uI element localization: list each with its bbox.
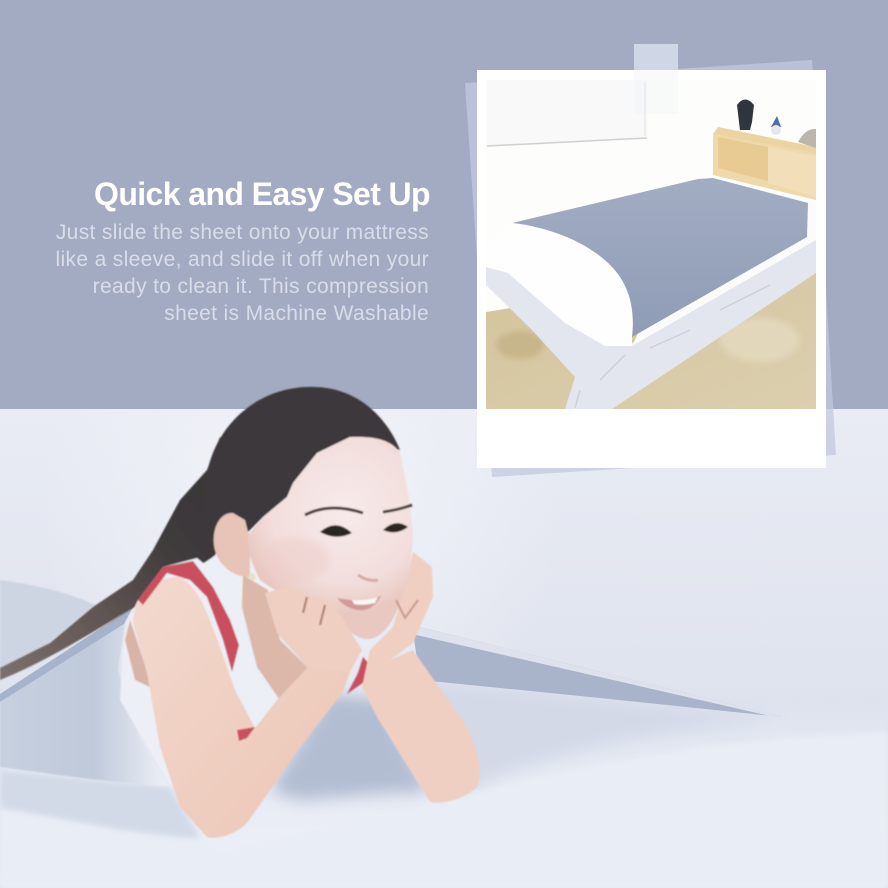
nose [358,575,378,580]
eyebrows [305,505,412,515]
gnome figurine [771,116,781,135]
mouth [337,596,381,610]
tank top [120,558,280,785]
girl [0,387,480,838]
tape overlay on photo [634,70,678,114]
eyes [320,523,408,537]
armpit shade [125,620,152,688]
red frill sleeve [138,561,239,672]
white mattress end [486,223,633,346]
body text [55,221,429,325]
black figurine [737,100,754,130]
bed foreground [0,732,888,888]
face [248,437,413,639]
window blind [487,80,647,147]
carpet [486,270,816,409]
tape [634,44,678,74]
upper arm and forearm [133,577,350,838]
skirt wrinkles [575,285,770,408]
viewer-left hand [265,587,362,672]
bed surface [0,695,888,888]
white strip right [632,236,816,346]
photo scene [486,80,816,409]
head hair [205,387,400,560]
earring [248,574,256,580]
chest and neck [242,575,310,700]
top background band [0,0,888,409]
polaroid photo [477,70,826,468]
wall [486,80,816,409]
finger lines [303,597,325,625]
ponytail [0,437,260,680]
nightstand [713,127,816,200]
right hand finger crease [396,600,418,618]
red hem [237,727,255,741]
dark shadow between the arms [270,695,425,800]
ear [214,513,250,577]
plush toy [798,129,816,148]
carpet blotches [496,318,800,362]
shadow on bed left [0,770,200,838]
bed skirt [486,236,816,409]
photo shadow sheet [465,60,836,477]
heading: Quick and Easy Set Up [94,176,430,212]
viewer-right hand [370,552,433,660]
teeth [352,597,378,605]
body text: sheet is Machine Washable [164,302,429,325]
body text: ready to clean it. This compression [93,275,429,298]
red frill small [347,657,377,694]
sheet over body left [0,607,168,786]
pillow behind left [0,580,95,672]
raised sheet right [412,625,782,717]
body text: like a sleeve, and slide it off when your [55,248,429,271]
wide soft shadow under the raised sheet [400,680,775,790]
right forearm [362,650,480,803]
cheek blush [260,538,330,582]
body text: Just slide the sheet onto your mattress [56,221,429,244]
grey sheet [512,178,808,337]
lower background [0,409,888,888]
